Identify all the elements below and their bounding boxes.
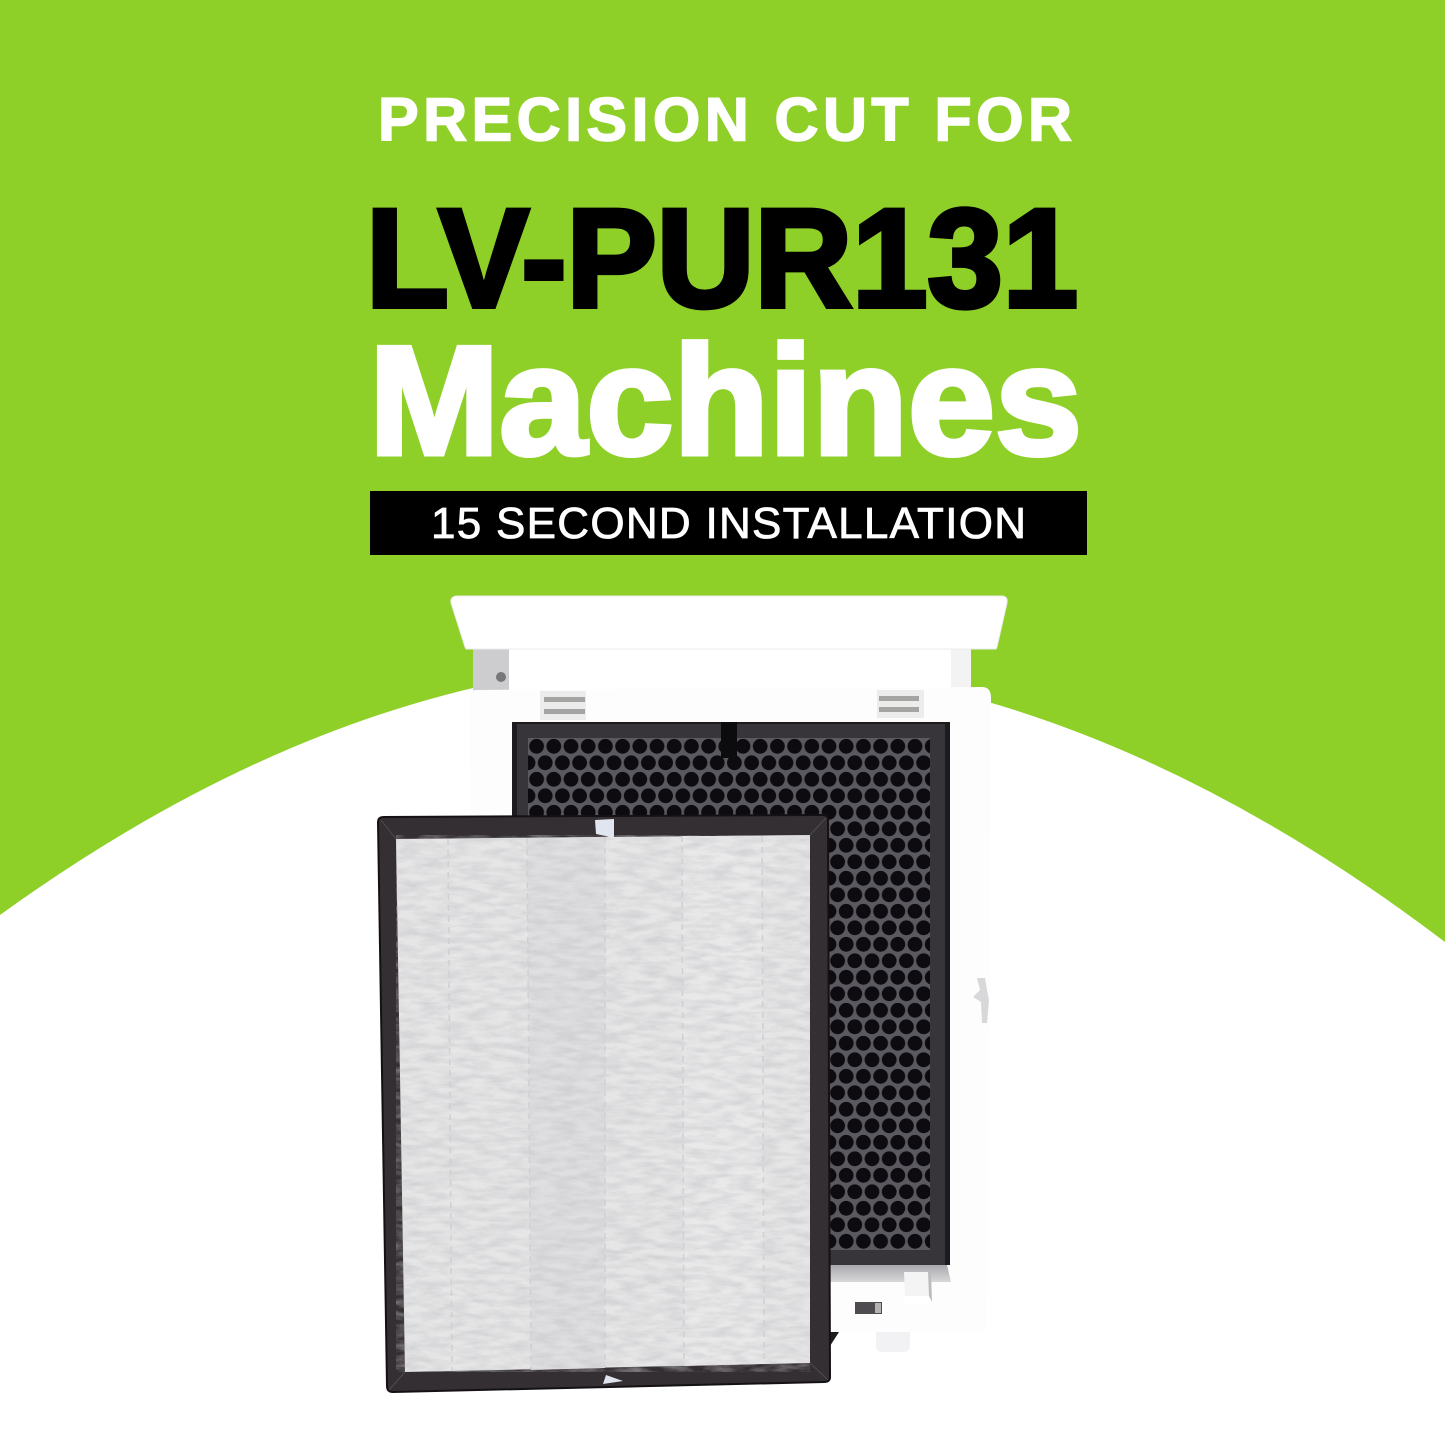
shadow under filter [830,1332,839,1346]
filter frame [378,815,830,1392]
pull strap [721,722,737,758]
heading: machines: Machines [369,314,1082,487]
carbon filter frame [512,722,950,1265]
hinge left [540,691,586,720]
side latch [973,978,989,1023]
honeycomb carbon filter [528,738,930,1250]
heading: precision cut for: PRECISION CUT FOR [378,86,1072,154]
banner: 15 second installation: 15 SECOND INSTALLATION [431,499,1026,548]
machine body [469,687,991,1332]
bottom ledge and notch [830,1265,951,1314]
top tab [595,819,614,839]
white arc [0,661,1445,1445]
frame corner seams [381,818,828,1390]
base peg [876,1332,910,1352]
slot [855,1302,882,1314]
bottom tab [603,1375,623,1384]
banner: 15 second installation [370,491,1087,555]
heading: model name: LV-PUR131 [366,180,1078,336]
filter media [396,835,810,1372]
hinge right [877,690,924,718]
air purifier machine [451,596,1007,1352]
foreground pre-filter [378,815,830,1392]
machine top lid [451,596,1007,649]
machine neck [473,645,971,693]
